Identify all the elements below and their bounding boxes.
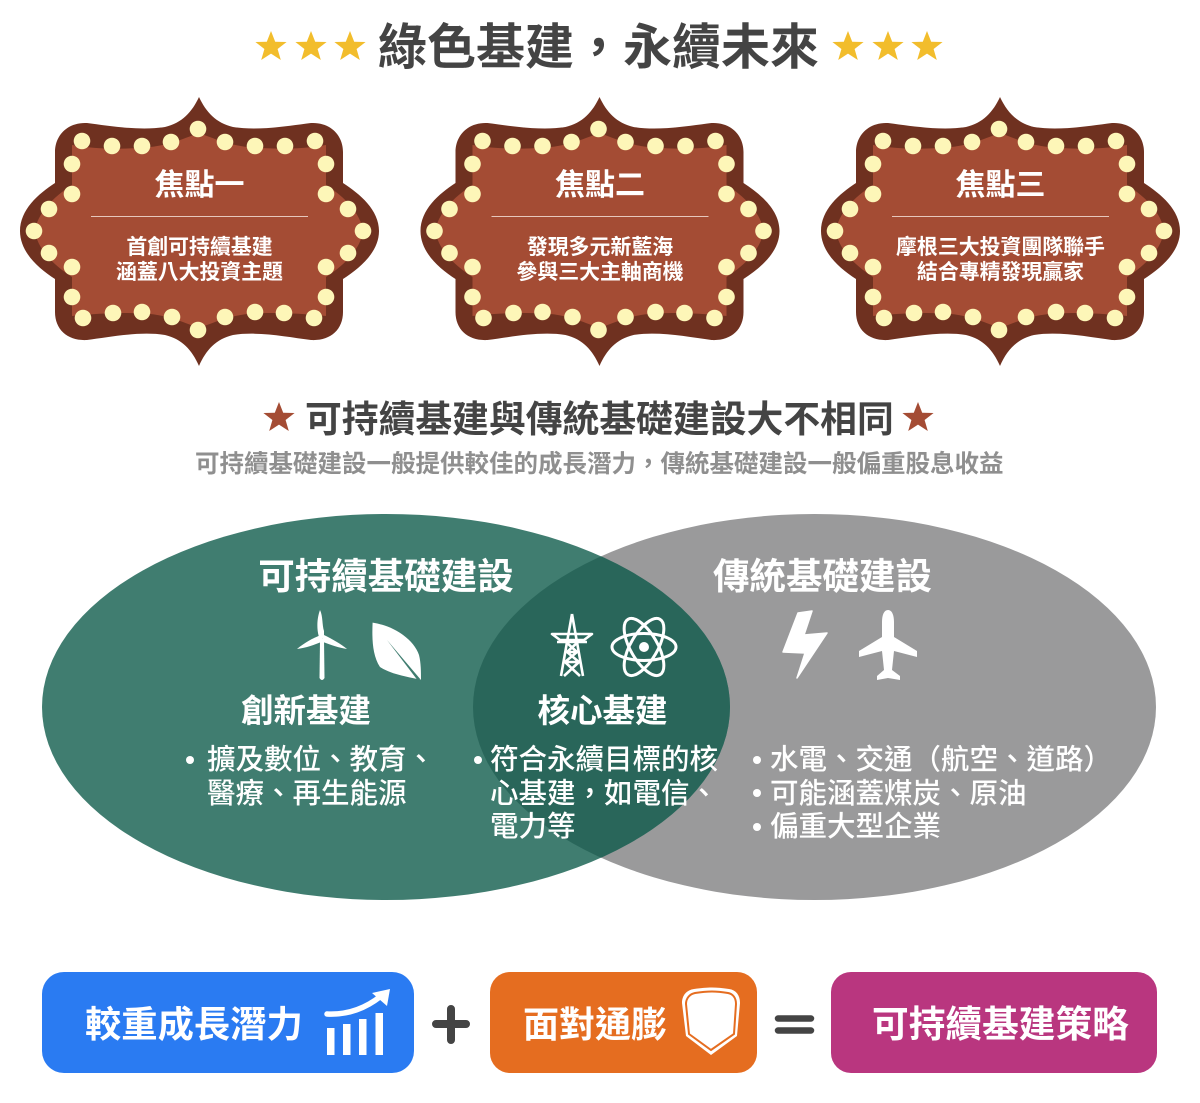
heading: sustainable infrastructure: 可持續基礎建設: [258, 547, 514, 600]
panel: focus two: 焦點二: [555, 160, 645, 204]
panel: growth potential: [42, 972, 414, 1073]
panel: focus two: [420, 97, 780, 366]
icon: shield: [682, 988, 740, 1055]
panel: focus two: 發現多元新藍海: [527, 231, 673, 261]
panel: focus three: 結合專精發現贏家: [917, 256, 1084, 286]
list: traditional infrastructure: [753, 737, 1112, 845]
icon: left brown star: [263, 402, 295, 431]
sustainable infrastructure circle: [42, 514, 730, 900]
traditional infrastructure circle: [473, 514, 1156, 900]
panel: focus one: 焦點一: [154, 160, 244, 204]
icon: rising bar chart: [327, 989, 390, 1055]
heading: core infrastructure: 核心基建: [537, 685, 668, 732]
icon: lightning bolt: [783, 611, 827, 678]
list: core infrastructure: [474, 737, 718, 845]
list: innovative infrastructure: [186, 737, 435, 812]
panel: sustainable strategy: 可持續基建策略: [872, 994, 1129, 1048]
panel: inflation: [490, 972, 757, 1073]
panel: inflation: 面對通膨: [523, 996, 667, 1048]
heading: comparison: [263, 389, 934, 443]
heading text: 可持續基建與傳統基礎建設大不相同: [305, 389, 894, 443]
heading: traditional infrastructure: 傳統基礎建設: [713, 547, 932, 600]
core overlap: [473, 556, 730, 858]
icon: equals: [778, 1018, 811, 1030]
panel: growth potential: 較重成長潛力: [85, 996, 303, 1048]
panel: focus one: 首創可持續基建: [126, 231, 273, 261]
title text: 綠色基建，永續未來: [378, 8, 819, 79]
list: traditional infrastructure: 可能涵蓋煤炭、原油: [770, 771, 1027, 812]
list: innovative infrastructure: 醫療、再生能源: [207, 771, 407, 812]
icon: right title stars: [832, 31, 943, 60]
icon: power pylon: [552, 614, 592, 676]
list: innovative infrastructure: 擴及數位、教育、: [207, 737, 435, 778]
list: traditional infrastructure: 偏重大型企業: [770, 804, 941, 845]
title: [255, 8, 943, 79]
icon: wind turbine: [297, 610, 347, 680]
panel: focus one: 涵蓋八大投資主題: [116, 256, 283, 286]
icon: leaf: [372, 623, 421, 680]
venn diagram: [42, 514, 1156, 900]
icon: plus: [436, 1009, 466, 1040]
panel: focus three: [821, 97, 1180, 366]
panel: sustainable strategy: [831, 972, 1157, 1073]
icon: atom: [612, 613, 676, 681]
list: traditional infrastructure: 水電、交通（航空、道路）: [770, 737, 1112, 778]
heading: innovative infrastructure: 創新基建: [241, 685, 371, 732]
panel: focus three: 摩根三大投資團隊聯手: [896, 231, 1105, 261]
panel: focus two: 參與三大主軸商機: [516, 256, 684, 286]
list: core infrastructure: 電力等: [490, 804, 576, 845]
subheading: 可持續基礎建設一般提供較佳的成長潛力，傳統基礎建設一般偏重股息收益: [195, 445, 1004, 480]
icon: right brown star: [902, 402, 934, 431]
panel: focus one: [20, 97, 379, 366]
panel: focus three: 焦點三: [956, 160, 1046, 204]
icon: airplane: [859, 610, 917, 680]
list: core infrastructure: 心基建，如電信、: [490, 771, 718, 812]
icon: left title stars: [255, 31, 366, 60]
list: core infrastructure: 符合永續目標的核: [490, 737, 718, 778]
